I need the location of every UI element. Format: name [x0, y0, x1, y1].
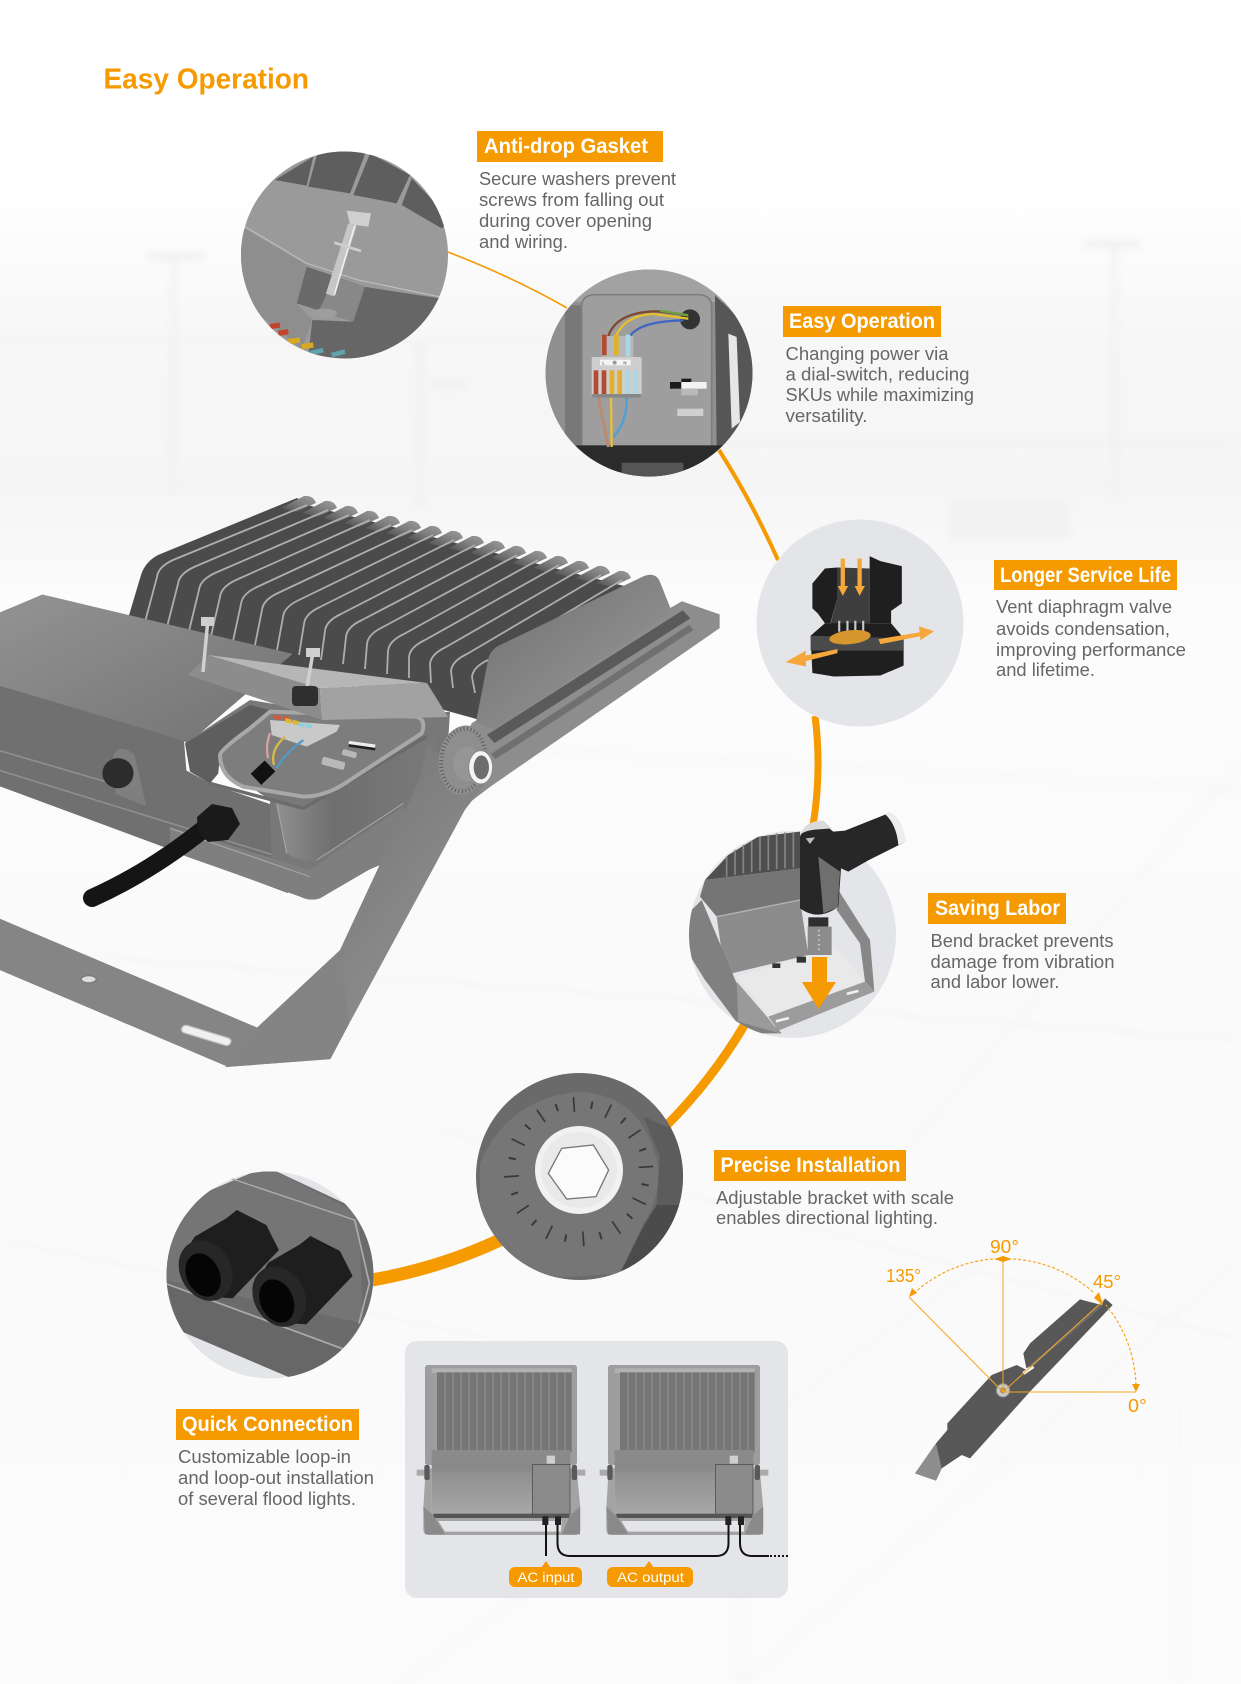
icon: flood light one [417, 1365, 585, 1535]
feature: anti-drop gasket: Anti-drop Gasket [484, 135, 648, 158]
description: Changing power via [786, 344, 950, 364]
feature: quick connection [166, 1172, 374, 1509]
icon: flood light two [600, 1365, 768, 1535]
description: Secure washers prevent [479, 169, 676, 189]
description: enables directional lighting. [716, 1208, 938, 1228]
description [178, 1447, 374, 1509]
description [930, 931, 1114, 992]
angle labels: 0° [1128, 1396, 1147, 1416]
description: Vent diaphragm valve [996, 597, 1172, 617]
feature: longer service life [756, 520, 1186, 726]
icon: wiring compartment circle: N [623, 360, 626, 365]
description [996, 597, 1186, 680]
label [783, 306, 941, 337]
angle adjustment diagram [886, 1237, 1147, 1481]
feature: easy operation [543, 265, 974, 485]
label [928, 893, 1066, 924]
description: versatility. [786, 406, 868, 426]
description: damage from vibration [930, 952, 1114, 972]
icon: electric drill [800, 812, 906, 955]
feature: easy operation: Easy Operation [789, 310, 935, 333]
feature: precise installation [476, 1072, 954, 1283]
corner housing underlay [185, 700, 450, 897]
feature: saving labor [688, 812, 1114, 1038]
icon: vent valve circle [756, 520, 964, 726]
description: of several flood lights. [178, 1489, 356, 1509]
description: during cover opening [479, 211, 652, 231]
icon: lamp side profile [915, 1298, 1113, 1481]
open junction compartment [170, 705, 437, 900]
description [479, 169, 676, 252]
icon: downward arrow [802, 957, 836, 1009]
description: and labor lower. [930, 972, 1060, 992]
description: Bend bracket prevents [930, 931, 1114, 951]
connector: saving labor to precise installation [666, 1024, 745, 1126]
title: Easy Operation [104, 64, 309, 96]
icon: wiring compartment circle: L [602, 360, 605, 365]
connector: thin line from gasket to wiring [448, 252, 567, 308]
label [714, 1150, 906, 1181]
angle labels: 45° [1093, 1272, 1121, 1292]
angle labels: 135° [886, 1266, 921, 1286]
wiring [546, 1525, 790, 1556]
description: improving performance [996, 640, 1186, 660]
feature: longer service life: Longer Service Life [1000, 564, 1171, 587]
icon: valve cutaway with airflow arrows [786, 556, 934, 677]
description [786, 344, 974, 426]
feature: precise installation: Precise Installation [720, 1154, 900, 1177]
scale dial and nut [434, 722, 493, 798]
large end fin [476, 575, 672, 730]
driver box body [0, 595, 293, 893]
description: and lifetime. [996, 660, 1095, 680]
feature: anti-drop gasket [238, 131, 676, 362]
description: and loop-out installation [178, 1468, 374, 1488]
label [477, 131, 663, 162]
icon: bracket close-up circle [688, 830, 896, 1038]
description: avoids condensation, [996, 619, 1170, 639]
lower mounting strap and bracket arm [0, 747, 486, 1067]
angle guide lines and arcs [909, 1259, 1136, 1392]
back plate [439, 601, 720, 806]
feature: saving labor: Saving Labor [935, 897, 1060, 920]
panel: loop-in loop-out wiring diagram [405, 1341, 790, 1598]
label [994, 560, 1177, 590]
feature: quick connection: Quick Connection [182, 1413, 353, 1436]
description: Customizable loop-in [178, 1447, 351, 1467]
arrow heads [909, 1256, 1140, 1392]
power cable and gland [92, 804, 240, 898]
description [716, 1188, 954, 1228]
tag: AC input: AC input [518, 1569, 575, 1585]
description: a dial-switch, reducing [786, 364, 970, 384]
description: screws from falling out [479, 190, 664, 210]
label [176, 1409, 359, 1440]
description: and wiring. [479, 232, 568, 252]
tag: AC input [509, 1561, 582, 1587]
hinged lid with screws [188, 617, 448, 720]
angle labels: 90° [990, 1237, 1019, 1257]
connector: precise installation to quick connection [372, 1240, 500, 1280]
connector: wiring to valve [719, 450, 778, 560]
icon: cable glands circle [166, 1172, 374, 1378]
connector: valve to saving labor [813, 716, 818, 826]
tag: AC output [607, 1561, 693, 1587]
heat sink fins [127, 496, 640, 720]
icon: wiring compartment circle [546, 270, 752, 476]
description: Adjustable bracket with scale [716, 1188, 954, 1208]
icon: scale dial circle [476, 1072, 687, 1283]
description: SKUs while maximizing [786, 385, 974, 405]
tag: AC output: AC output [617, 1569, 684, 1585]
icon: gasket close-up circle [238, 150, 452, 362]
angle labels [886, 1237, 1147, 1416]
main flood light product illustration [0, 496, 720, 1067]
